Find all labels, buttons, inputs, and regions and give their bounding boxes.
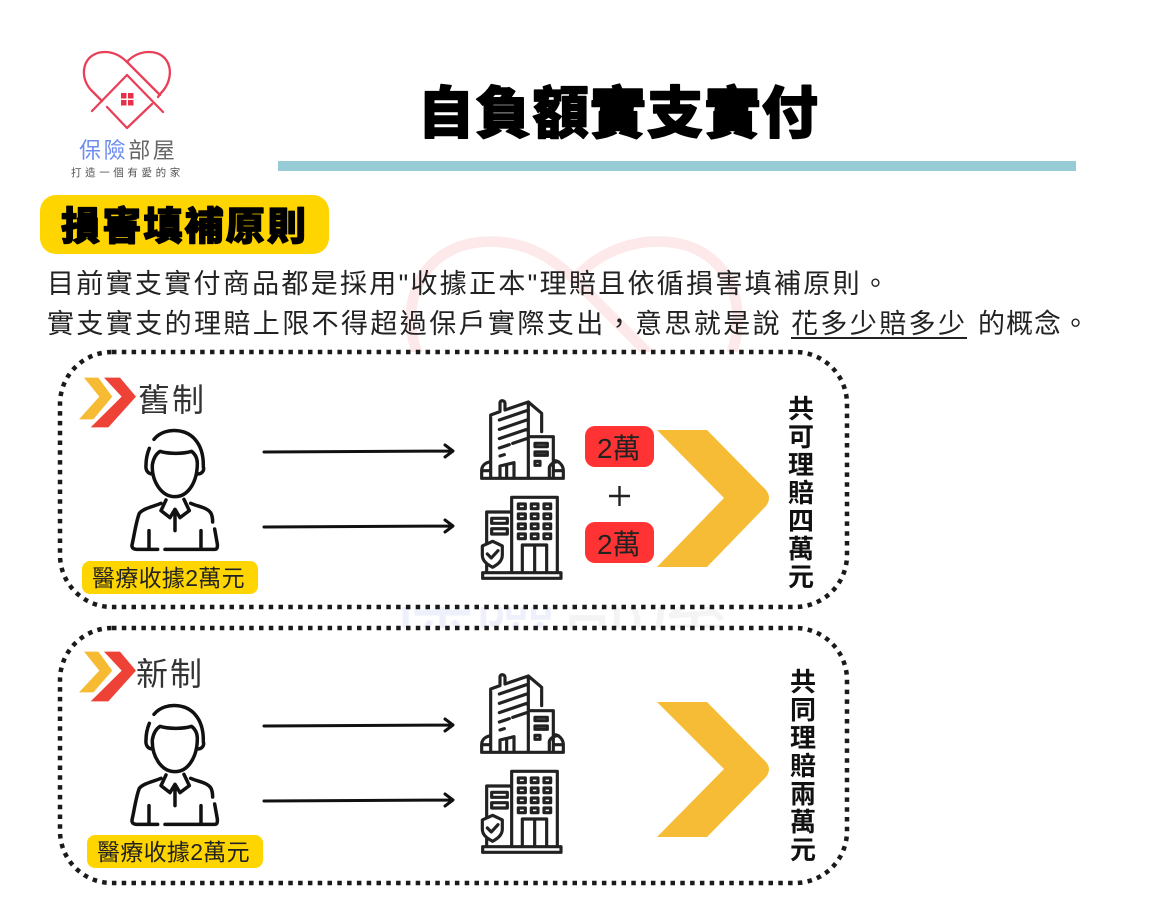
section heading: [40, 195, 329, 254]
icon: tower building: [482, 675, 563, 752]
panel border: [60, 352, 847, 607]
logo tagline: 打造一個有愛的家: [71, 166, 184, 179]
result text: 理: [790, 723, 816, 753]
result text: 同: [790, 695, 816, 725]
arrow to insurer 1: [264, 445, 453, 457]
result text: 兩: [790, 779, 816, 809]
logo name: 保險部屋: [79, 138, 177, 163]
receipt label: 醫療收據2萬元: [92, 565, 245, 591]
heading pill: [40, 195, 329, 254]
result text: 萬: [790, 807, 816, 837]
background watermark: faint heart logo: 保險部屋: [388, 563, 732, 659]
label: new: 新制: [136, 656, 204, 692]
icon: office building: [482, 497, 561, 578]
panel: old system: [60, 352, 847, 607]
result text: [790, 667, 816, 865]
result text: 四: [788, 506, 814, 536]
receipt label: [87, 835, 263, 868]
result text: 萬: [788, 534, 814, 564]
result text: 共: [790, 667, 816, 697]
amount badge 2: 2萬: [597, 529, 641, 560]
title: 自負額實支實付: [418, 69, 819, 150]
receipt label: [82, 561, 258, 594]
plus sign: [609, 486, 630, 506]
result text: 元: [790, 835, 816, 865]
result text: 可: [788, 422, 814, 452]
panel: new system: [60, 628, 847, 883]
intro text: [47, 269, 1090, 339]
icon: person: [132, 431, 217, 549]
result text: [788, 394, 814, 592]
arrow to insurer 2: [264, 520, 453, 532]
background watermark: faint heart logo: [388, 242, 738, 659]
result text: 賠: [788, 478, 814, 508]
icon: double chevron: [79, 378, 136, 427]
icon: office building: [482, 771, 561, 852]
receipt label: 醫療收據2萬元: [97, 839, 250, 865]
result text: 元: [788, 562, 814, 592]
big chevron: [657, 430, 769, 567]
arrow to insurer 1: [264, 719, 453, 731]
result text: 理: [788, 450, 814, 480]
logo: [71, 52, 184, 179]
icon: person: [132, 706, 217, 824]
amount badge 1: 2萬: [597, 433, 641, 464]
intro text: 實支實支的理賠上限不得超過保戶實際支出，意思就是說: [47, 309, 782, 339]
result text: 賠: [790, 751, 816, 781]
heading text: 損害填補原則: [61, 196, 308, 252]
icon: double chevron: [79, 652, 136, 701]
intro text: 花多少賠多少: [791, 309, 967, 339]
amount badge 2: [585, 522, 654, 563]
icon: heart and house: [84, 52, 170, 128]
icon: tower building: [482, 401, 563, 478]
title underline: [278, 161, 1076, 171]
intro text: 的概念。: [978, 309, 1090, 339]
arrow to insurer 2: [264, 794, 453, 806]
label: old: 舊制: [138, 382, 206, 418]
intro text: 目前實支實付商品都是採用"收據正本"理賠且依循損害填補原則。: [47, 269, 891, 299]
panel border: [60, 628, 847, 883]
result text: 共: [788, 394, 814, 424]
amount badge 1: [585, 426, 654, 467]
big chevron: [657, 702, 769, 837]
